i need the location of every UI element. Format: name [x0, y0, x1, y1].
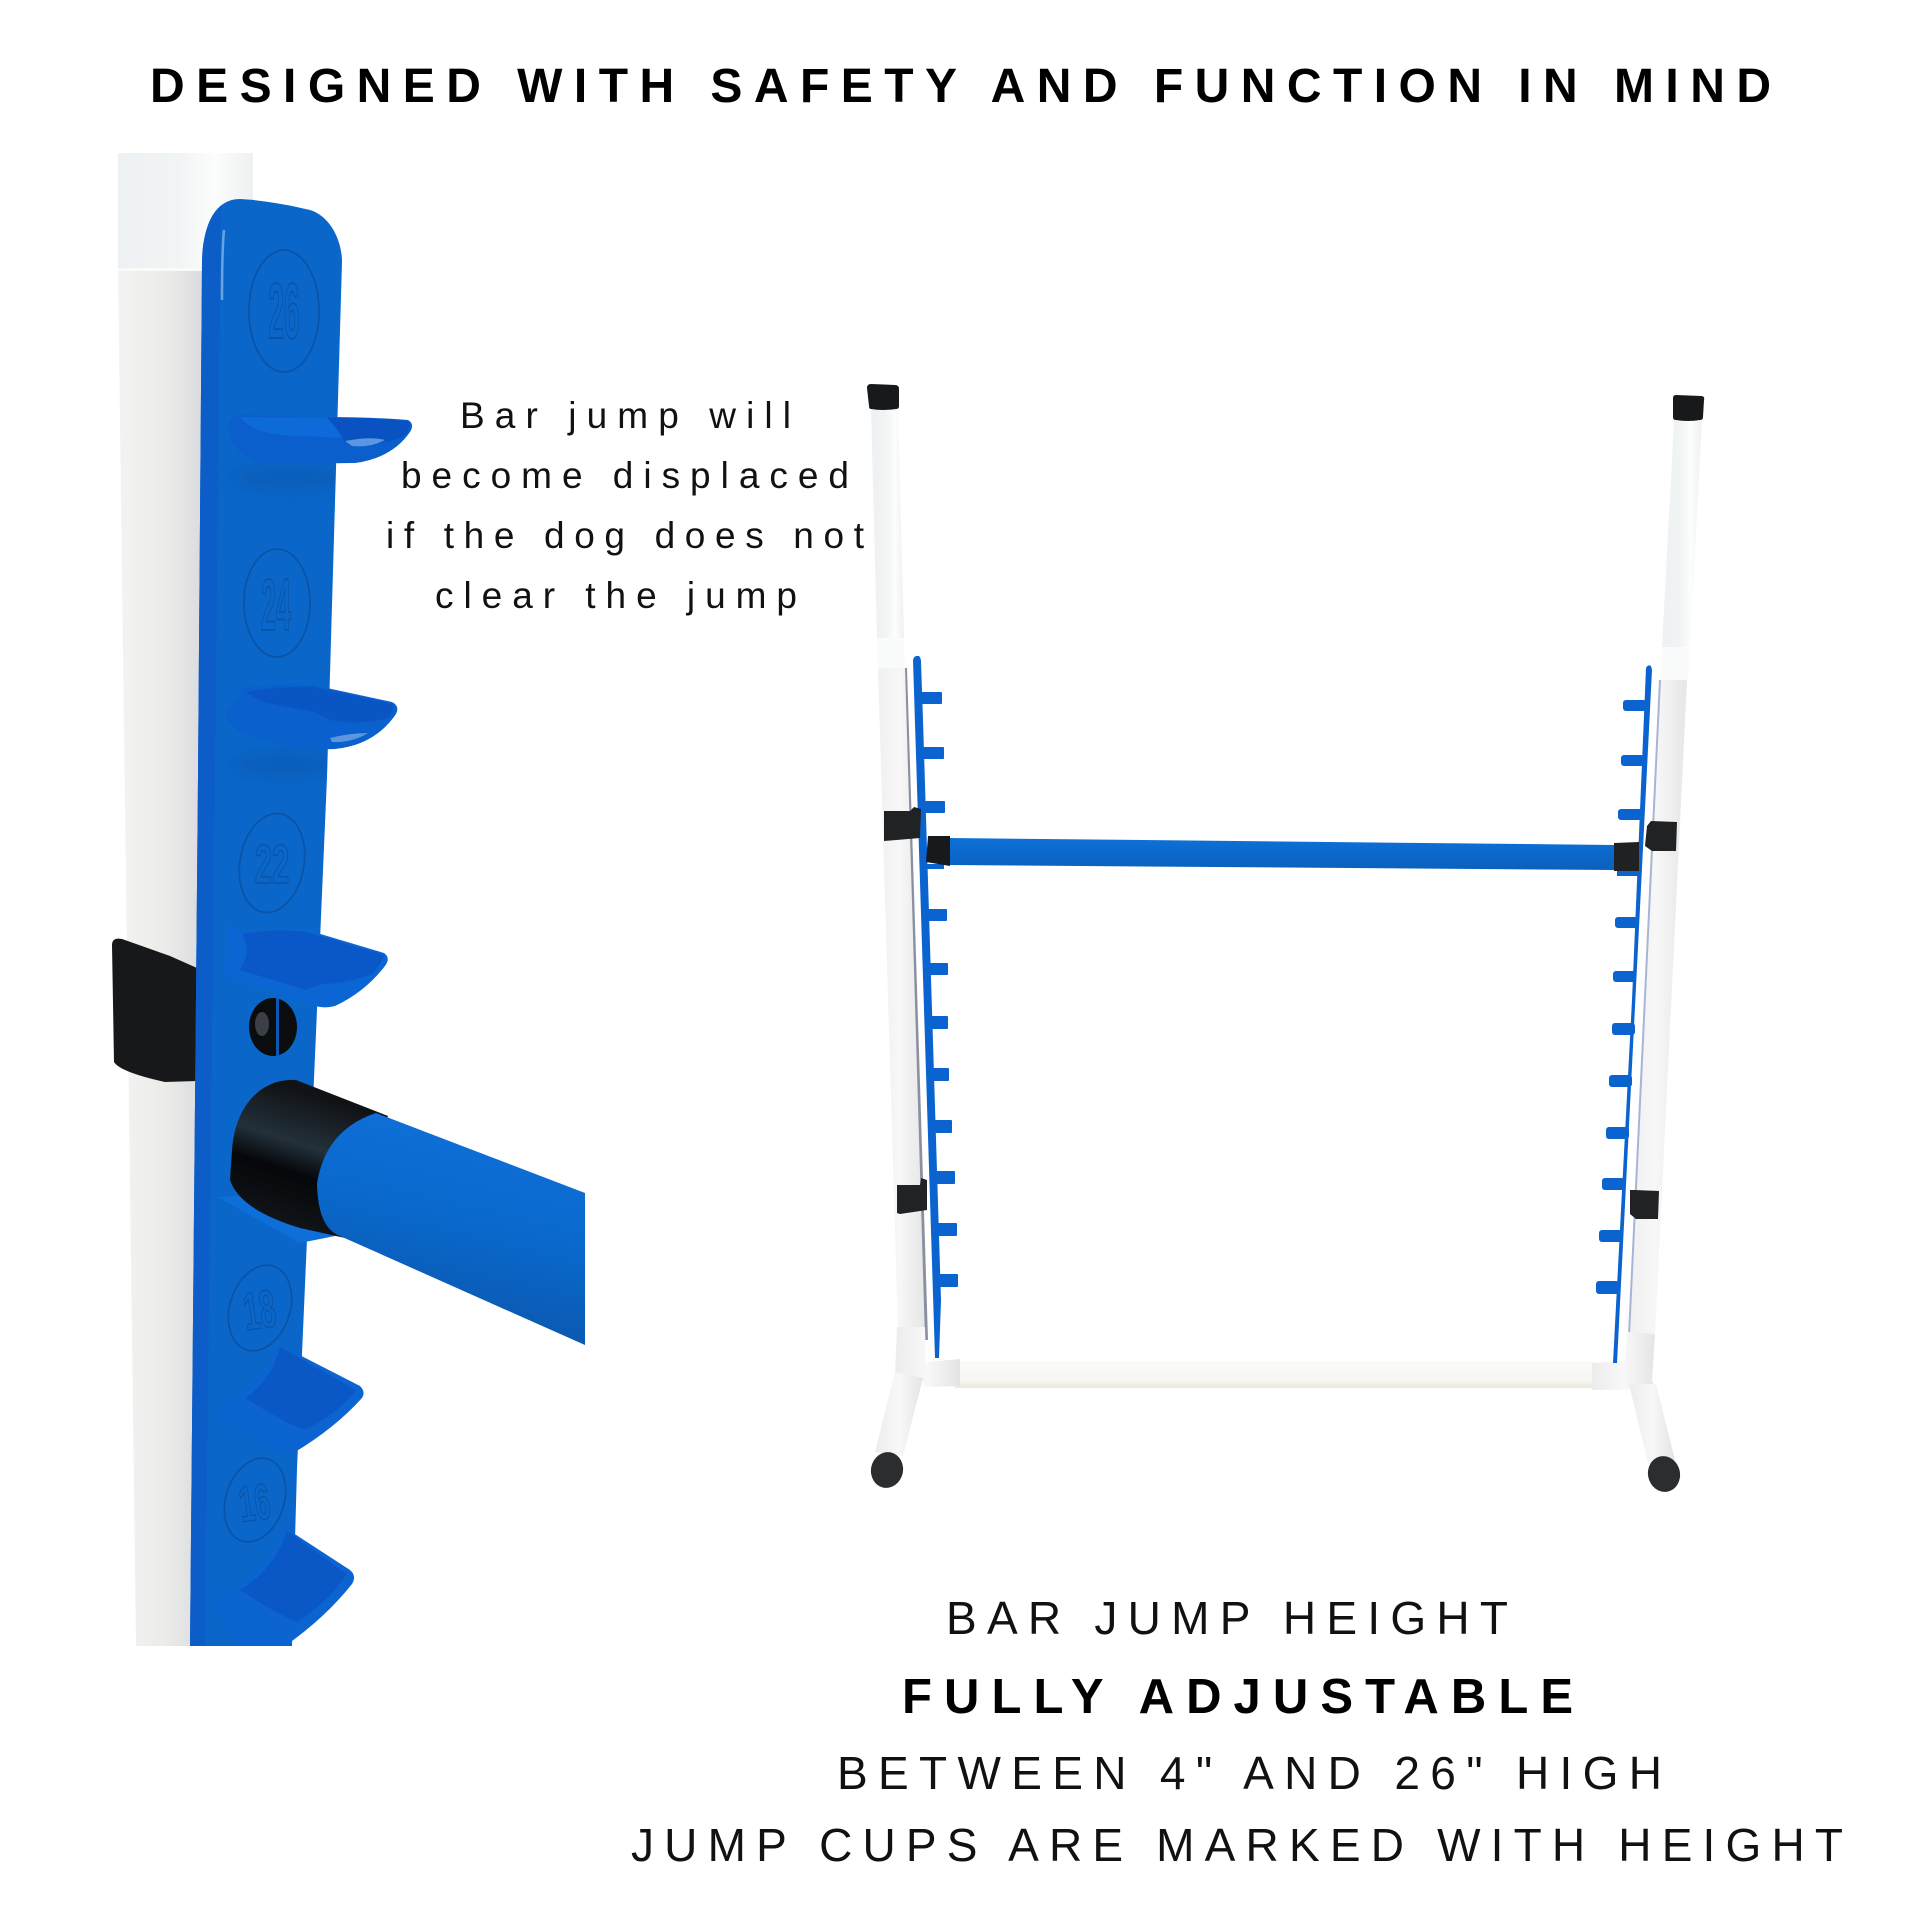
- black clamps: [884, 807, 1677, 1219]
- jump cup 3: [223, 923, 388, 1007]
- right foot: [1645, 1453, 1683, 1495]
- marker 24: 24: [261, 564, 291, 646]
- base crossbar: [955, 1361, 1595, 1388]
- marker 26: [249, 250, 319, 372]
- jump cup 1: [228, 415, 412, 464]
- blue bar: [317, 1113, 585, 1345]
- marker 22: [232, 808, 312, 918]
- jump cup 2: [226, 684, 397, 749]
- callout text: Bar jump will: [460, 395, 791, 436]
- marker 26: 26: [268, 269, 300, 355]
- left blue plate and cups: [913, 656, 958, 1358]
- bar support lip: [218, 1196, 345, 1243]
- marker 18: 18: [240, 1280, 280, 1343]
- black clamp: [112, 939, 197, 1082]
- right base fitting and leg: [1592, 1332, 1683, 1495]
- jump cup 5: [216, 1345, 364, 1454]
- jump cup 6: [212, 1529, 354, 1646]
- marker 24: [244, 549, 310, 657]
- bar jump height: BAR JUMP HEIGHT: [946, 1592, 1508, 1644]
- right top cap: [1673, 395, 1704, 421]
- left bar cap: [926, 836, 950, 866]
- marker 16: 16: [235, 1472, 274, 1533]
- screw: [249, 998, 297, 1056]
- right upright: [1628, 395, 1704, 1335]
- range: BETWEEN 4" AND 26" HIGH: [837, 1747, 1662, 1799]
- marker 18: [218, 1257, 302, 1359]
- panel: full bar jump product photo: [867, 384, 1704, 1495]
- black bar cap: [230, 1080, 388, 1238]
- marker 22: 22: [255, 835, 289, 895]
- marker 16: [214, 1450, 296, 1550]
- panel: close-up photo of jump cup: [112, 153, 585, 1650]
- right blue plate and cups: [1596, 665, 1652, 1363]
- callout text: clear the jump: [435, 575, 797, 616]
- callout text: if the dog does not: [386, 515, 865, 556]
- markings: JUMP CUPS ARE MARKED WITH HEIGHT: [631, 1819, 1843, 1871]
- title: DESIGNED WITH SAFETY AND FUNCTION IN MIND: [150, 60, 1771, 113]
- white upright pipe: [118, 153, 253, 1646]
- left upright: [867, 384, 928, 1340]
- left top cap: [867, 384, 899, 410]
- fully adjustable: FULLY ADJUSTABLE: [902, 1670, 1573, 1724]
- callout text: become displaced: [401, 455, 849, 496]
- callout text: [386, 395, 865, 616]
- left foot: [868, 1449, 906, 1491]
- left base fitting and leg: [868, 1327, 960, 1491]
- embossed height markers: [214, 250, 319, 1550]
- blue height plate: [190, 199, 342, 1646]
- blue jump bar: [926, 836, 1639, 871]
- height information text: [631, 1592, 1843, 1871]
- right bar cap: [1614, 842, 1639, 871]
